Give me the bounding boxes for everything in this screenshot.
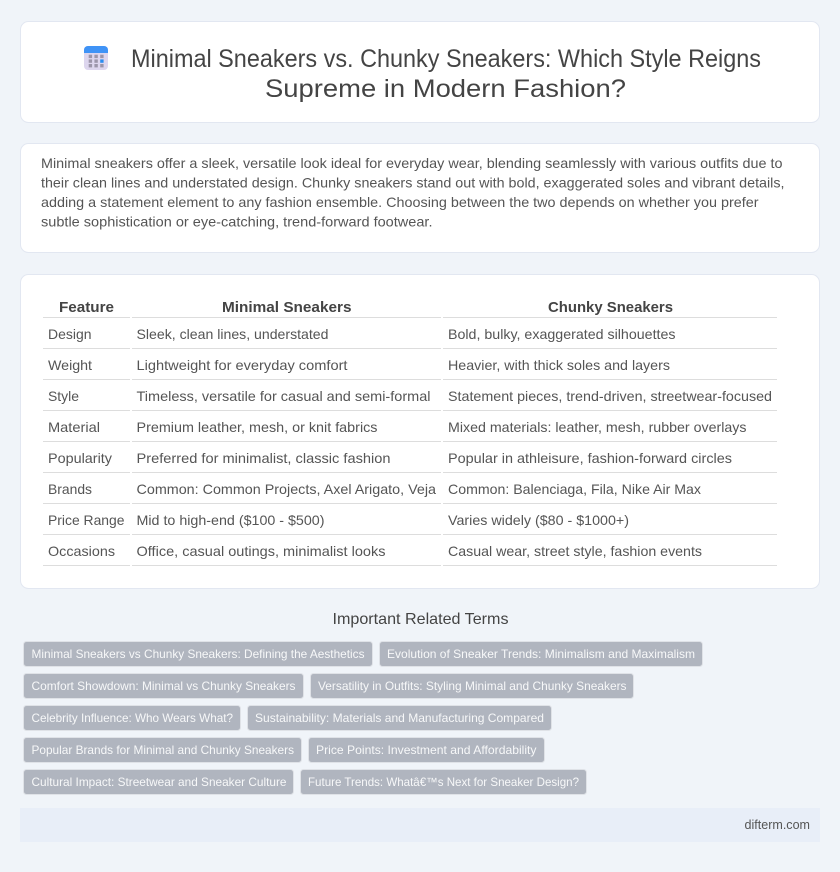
- heading: important related terms: Important Related Terms: [332, 611, 508, 628]
- tag: comfort showdown: Comfort Showdown: Minimal vs Chunky Sneakers: [32, 679, 296, 693]
- tag: cultural impact: [24, 770, 294, 794]
- row: occasions: [48, 543, 702, 559]
- row: popularity: Popularity: [48, 450, 112, 466]
- tag: popular brands: [24, 738, 302, 762]
- row: brands: Common: Common Projects, Axel Arigato, Veja: [136, 481, 436, 497]
- row: style: Timeless, versatile for casual and semi-formal: [136, 388, 430, 404]
- title: Supreme in Modern Fashion?: [265, 75, 626, 103]
- intro text: [41, 155, 784, 230]
- tag: price points: Price Points: Investment and Affordability: [316, 743, 536, 757]
- intro text: subtle sophistication or eye-catching, trend-forward footwear.: [41, 214, 433, 230]
- row: brands: [48, 481, 701, 497]
- row: material: Material: [48, 419, 100, 435]
- title: Minimal Sneakers vs. Chunky Sneakers: Which Style Reigns: [131, 45, 761, 73]
- panel: title header: [20, 22, 820, 122]
- row: design: Design: [48, 326, 92, 342]
- tag: celebrity influence: Celebrity Influence: Who Wears What?: [32, 711, 233, 725]
- row: style: Statement pieces, trend-driven, streetwear-focused: [448, 388, 772, 404]
- row: material: Mixed materials: leather, mesh, rubber overlays: [448, 419, 746, 435]
- tag: celebrity influence: [24, 706, 240, 730]
- tag: price points: [308, 738, 544, 762]
- table header row: Minimal Sneakers: [222, 299, 352, 316]
- row: price range: Mid to high-end ($100 - $500): [136, 512, 324, 528]
- tag: future trends: Future Trends: Whatâ€™s Next for Sneaker Design?: [308, 775, 579, 789]
- table header row: [59, 299, 673, 316]
- panel: related term tags: [24, 642, 702, 794]
- table header row: Feature: [59, 299, 114, 316]
- row: design: [48, 326, 676, 342]
- tag: comfort showdown: [24, 674, 304, 698]
- panel: intro paragraph: [20, 144, 820, 252]
- icon: calendar grid: [84, 46, 108, 70]
- row: occasions: Occasions: [48, 543, 115, 559]
- tag: defining the aesthetics: Minimal Sneakers vs Chunky Sneakers: Defining the Aesthetics: [32, 647, 364, 661]
- row: popularity: Preferred for minimalist, classic fashion: [136, 450, 390, 466]
- footer: difterm.com: [744, 817, 810, 832]
- row: popularity: [48, 450, 732, 466]
- row: style: Style: [48, 388, 79, 404]
- tag: defining the aesthetics: [24, 642, 372, 666]
- tag: cultural impact: Cultural Impact: Streetwear and Sneaker Culture: [32, 775, 287, 789]
- intro text: Minimal sneakers offer a sleek, versatile look ideal for everyday wear, blending seamlessly with various outfits due to: [41, 155, 783, 171]
- tag: future trends: [300, 770, 586, 794]
- footer: [20, 808, 820, 842]
- tag: popular brands: Popular Brands for Minimal and Chunky Sneakers: [32, 743, 294, 757]
- row: material: [48, 419, 746, 435]
- tag: evolution of sneaker trends: Evolution of Sneaker Trends: Minimalism and Maximalism: [387, 647, 695, 661]
- intro text: adding a statement element to any fashion ensemble. Choosing between the two depends on whether you prefer: [41, 194, 759, 210]
- row: occasions: Office, casual outings, minimalist looks: [136, 543, 386, 559]
- tag: versatility in outfits: Versatility in Outfits: Styling Minimal and Chunky Sneakers: [318, 679, 626, 693]
- row: design: Sleek, clean lines, understated: [136, 326, 328, 342]
- row: occasions: Casual wear, street style, fashion events: [448, 543, 702, 559]
- row: material: Premium leather, mesh, or knit fabrics: [136, 419, 378, 435]
- row: price range: Varies widely ($80 - $1000+): [448, 512, 629, 528]
- table header row: Chunky Sneakers: [548, 299, 673, 316]
- panel: comparison table: [20, 274, 820, 588]
- tag: evolution of sneaker trends: [380, 642, 702, 666]
- row: brands: Common: Balenciaga, Fila, Nike Air Max: [448, 481, 701, 497]
- row: weight: Heavier, with thick soles and layers: [448, 357, 670, 373]
- tag: sustainability: Sustainability: Materials and Manufacturing Compared: [255, 711, 544, 725]
- row: price range: [48, 512, 629, 528]
- row: weight: Weight: [48, 357, 92, 373]
- row: weight: Lightweight for everyday comfort: [136, 357, 348, 373]
- row: style: [48, 388, 772, 404]
- row: popularity: Popular in athleisure, fashion-forward circles: [448, 450, 732, 466]
- title: [131, 45, 761, 103]
- intro text: their clean lines and understated design. Chunky sneakers stand out with bold, exaggerated soles and vibrant details,: [41, 174, 784, 190]
- row: price range: Price Range: [48, 512, 125, 528]
- row: weight: [48, 357, 670, 373]
- tag: sustainability: [248, 706, 552, 730]
- tag: versatility in outfits: [310, 674, 634, 698]
- row: design: Bold, bulky, exaggerated silhouettes: [448, 326, 676, 342]
- row: brands: Brands: [48, 481, 92, 497]
